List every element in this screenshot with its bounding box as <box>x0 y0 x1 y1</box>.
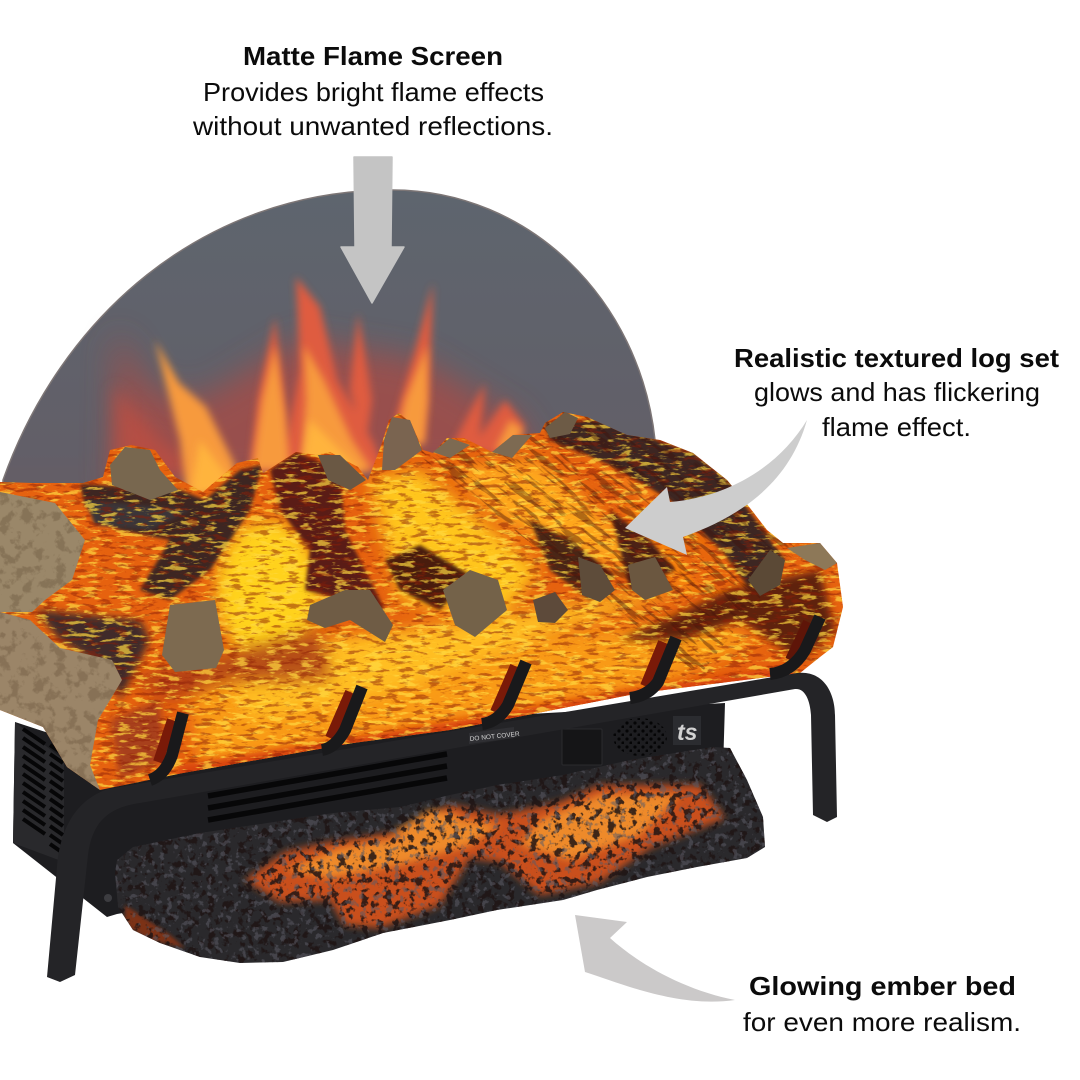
callout: ember bed <box>743 971 1021 1037</box>
box body <box>13 703 725 917</box>
slanted bark texture <box>386 412 798 670</box>
brand badge: ts <box>677 719 697 745</box>
charred rear log right <box>545 420 785 590</box>
charred log B <box>270 452 385 610</box>
log brackets <box>150 617 820 780</box>
screen disc <box>3 190 655 560</box>
char lower right <box>620 570 835 660</box>
log end texture <box>0 485 125 790</box>
panel: ember bed <box>110 740 775 970</box>
grate rail and legs <box>47 673 837 982</box>
panel: heater box <box>13 703 725 917</box>
brand badge <box>673 716 701 745</box>
warning label: DO NOT COVER <box>469 731 520 743</box>
description: Provides bright flame effects <box>203 77 544 107</box>
flame glow <box>113 277 540 495</box>
glow: centre and lower log <box>190 620 760 770</box>
panel: matte flame screen <box>3 190 655 560</box>
arrow: to log set <box>625 420 807 555</box>
side face <box>13 722 64 862</box>
side vent <box>23 729 63 853</box>
panel: iron grate <box>47 617 837 982</box>
front vent <box>208 754 447 820</box>
callout: log set: flame effect. <box>822 412 971 442</box>
callout: matte flame screen: without unwanted reflections. <box>192 111 553 141</box>
log silhouette <box>0 412 843 790</box>
speaker grille <box>613 718 667 756</box>
log end: big left <box>0 492 85 612</box>
arrow: to ember bed <box>575 915 735 1002</box>
switch <box>562 729 602 765</box>
panel: log set <box>0 412 843 790</box>
heading: Matte Flame Screen <box>243 41 503 71</box>
callout: log set <box>734 343 1059 442</box>
char left mid <box>35 610 150 700</box>
red underside at rail <box>174 668 794 775</box>
heading: Realistic textured log set <box>734 343 1059 373</box>
screw <box>104 894 112 902</box>
ember glow <box>245 785 725 928</box>
description: for even more realism. <box>743 1007 1021 1037</box>
ember log body <box>115 747 765 963</box>
callout: matte flame screen <box>192 41 553 141</box>
heading: Glowing ember bed <box>749 971 1016 1001</box>
ember crust texture <box>110 740 775 970</box>
arrow: to flame screen <box>341 157 404 303</box>
charred back log left <box>80 465 262 600</box>
charred log C <box>385 545 470 610</box>
streak texture <box>0 410 850 795</box>
description: glows and has flickering <box>754 377 1040 407</box>
log end: small caps <box>110 447 178 500</box>
char patches on log D <box>530 520 615 600</box>
